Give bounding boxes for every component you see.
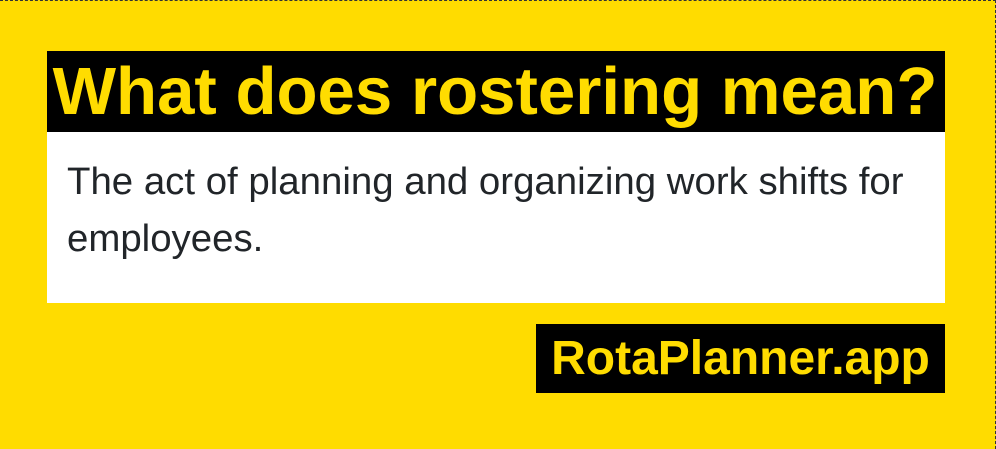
brand label: RotaPlanner.app: [551, 332, 930, 385]
definition text: [67, 160, 904, 260]
panel: definition: [47, 132, 945, 303]
definition text: The act of planning and organizing work shifts for: [67, 160, 904, 203]
definition text: employees.: [67, 217, 263, 260]
title banner: What does rostering mean?: [53, 54, 937, 129]
